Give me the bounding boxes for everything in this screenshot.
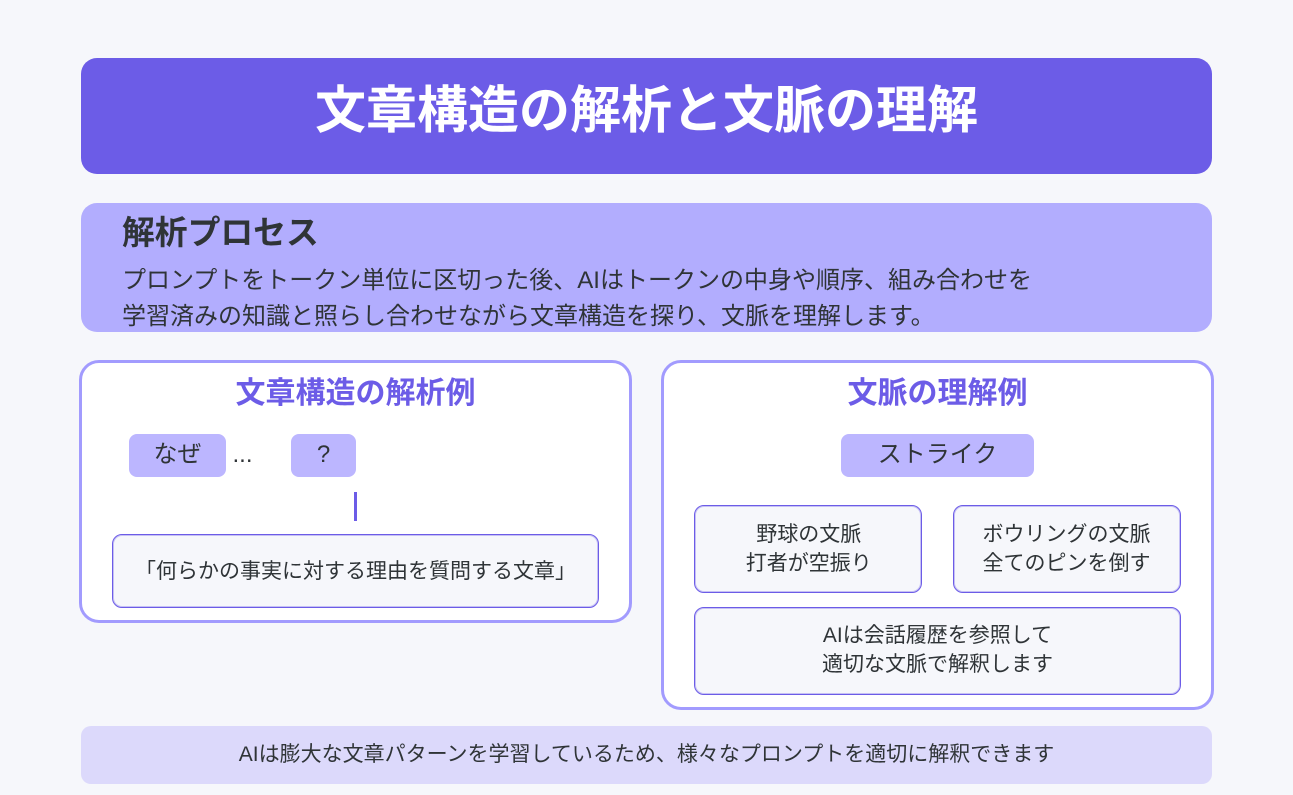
- word chip: strike: [841, 434, 1034, 477]
- interpretation box: [112, 534, 599, 608]
- footer note: AIは膨大な文章パターンを学習しているため、様々なプロンプトを適切に解釈できます: [239, 743, 1054, 766]
- bowling context box: 全てのピンを倒す: [982, 552, 1150, 575]
- baseball context box: 打者が空振り: [746, 552, 872, 575]
- token chip: naze: [129, 434, 226, 477]
- word chip: strike: ストライク: [878, 441, 997, 468]
- baseball context box: [694, 505, 922, 593]
- heading: analysis process: 解析プロセス: [122, 214, 319, 251]
- panel: analysis process: [81, 203, 1212, 332]
- panel: context example: [661, 360, 1214, 710]
- heading: context example: 文脈の理解例: [848, 377, 1028, 410]
- title banner: [81, 58, 1212, 174]
- process description: 学習済みの知識と照らし合わせながら文章構造を探り、文脈を理解します。: [122, 303, 935, 330]
- token chip: question mark: [291, 434, 356, 477]
- bowling context box: ボウリングの文脈: [982, 523, 1150, 546]
- footer note: [81, 726, 1212, 784]
- process description: プロンプトをトークン単位に区切った後、AIはトークンの中身や順序、組み合わせを: [122, 267, 1032, 294]
- process description: [122, 267, 1032, 330]
- baseball context box: 野球の文脈: [756, 523, 861, 546]
- token chip: question mark: ?: [317, 441, 330, 468]
- conversation history box: AIは会話履歴を参照して: [823, 624, 1052, 647]
- conversation history box: [694, 607, 1181, 695]
- conversation history box: 適切な文脈で解釈します: [822, 653, 1053, 676]
- interpretation box: 「何らかの事実に対する理由を質問する文章」: [135, 560, 576, 583]
- title: 文章構造の解析と文脈の理解: [315, 82, 978, 139]
- bowling context box: [953, 505, 1181, 593]
- panel: sentence structure example: [79, 360, 632, 623]
- connector line: [354, 492, 357, 521]
- heading: sentence structure example: 文章構造の解析例: [236, 377, 476, 410]
- token chip: naze: なぜ: [154, 441, 202, 468]
- ellipsis: ...: [232, 440, 253, 468]
